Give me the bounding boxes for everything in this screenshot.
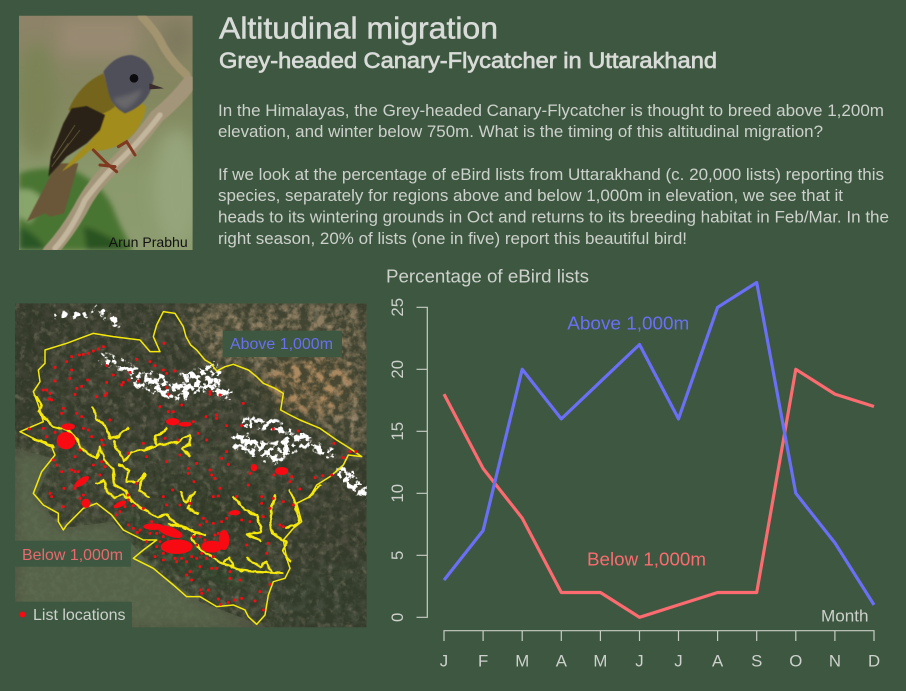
map label: above 1,000m <box>223 331 342 357</box>
y axis <box>388 298 427 622</box>
x axis <box>440 631 880 671</box>
photo credit: Arun Prabhu <box>109 234 188 250</box>
explanation paragraph: species, separately for regions above and below 1,000m in elevation, we see that it <box>218 186 843 205</box>
1,000 m contour <box>33 395 320 573</box>
legs <box>93 142 135 172</box>
explanation paragraph: heads to its wintering grounds in Oct and returns to its breeding habitat in Feb/Mar. In the <box>218 208 889 226</box>
series label: below 1,000m: Below 1,000m <box>587 548 706 569</box>
x axis: M <box>593 652 607 671</box>
x axis: S <box>751 652 762 671</box>
map legend: list locations <box>15 602 132 628</box>
x axis: N <box>829 652 841 671</box>
map label: above 1,000m: Above 1,000m <box>230 336 333 353</box>
list location dots <box>29 343 356 610</box>
explanation paragraph: right season, 20% of lists (one in five) report this beautiful bird! <box>218 229 687 248</box>
x axis: J <box>635 652 644 671</box>
map legend: list locations: List locations <box>33 607 126 624</box>
chart title: Percentage of eBird lists <box>386 266 589 287</box>
line: below 1,000m <box>444 369 874 617</box>
x axis: J <box>674 652 683 671</box>
y axis: 0 <box>388 613 407 622</box>
panel: line chart <box>386 266 880 671</box>
tail <box>27 163 78 222</box>
x axis: O <box>789 652 802 671</box>
x axis: M <box>515 652 529 671</box>
x axis label: month: Month <box>821 607 868 626</box>
y axis: 20 <box>388 360 407 379</box>
x axis: A <box>556 652 568 671</box>
y axis: 25 <box>388 298 407 317</box>
x axis: D <box>868 652 880 671</box>
intro paragraph: elevation, and winter below 750m. What is the timing of this altitudinal migration? <box>218 122 823 141</box>
x axis: A <box>712 652 724 671</box>
intro paragraph <box>218 101 884 141</box>
y axis: 15 <box>388 422 407 441</box>
intro paragraph: In the Himalayas, the Grey-headed Canary-Flycatcher is thought to breed above 1,200m <box>218 101 884 120</box>
photo: grey-headed canary-flycatcher <box>17 16 200 252</box>
wing <box>48 106 105 177</box>
x axis: F <box>478 652 488 671</box>
y axis: 5 <box>388 551 407 560</box>
series label: above 1,000m: Above 1,000m <box>567 312 689 333</box>
map label: below 1,000m <box>15 541 131 567</box>
line: above 1,000m <box>444 282 874 605</box>
body <box>62 103 146 172</box>
subtitle: Grey-headed Canary-Flycatcher in Uttarakhand <box>219 48 717 73</box>
head <box>103 55 154 113</box>
title: Altitudinal migration <box>219 10 498 46</box>
y axis: 10 <box>388 484 407 503</box>
state boundary <box>20 312 362 624</box>
branch <box>50 17 189 252</box>
explanation paragraph: If we look at the percentage of eBird lists from Uttarakhand (c. 20,000 lists) reporting this <box>218 165 884 184</box>
map label: below 1,000m: Below 1,000m <box>22 547 123 564</box>
snow <box>53 308 365 495</box>
explanation paragraph <box>218 165 889 248</box>
panel: map of Uttarakhand <box>15 303 367 628</box>
x axis: J <box>440 652 448 671</box>
